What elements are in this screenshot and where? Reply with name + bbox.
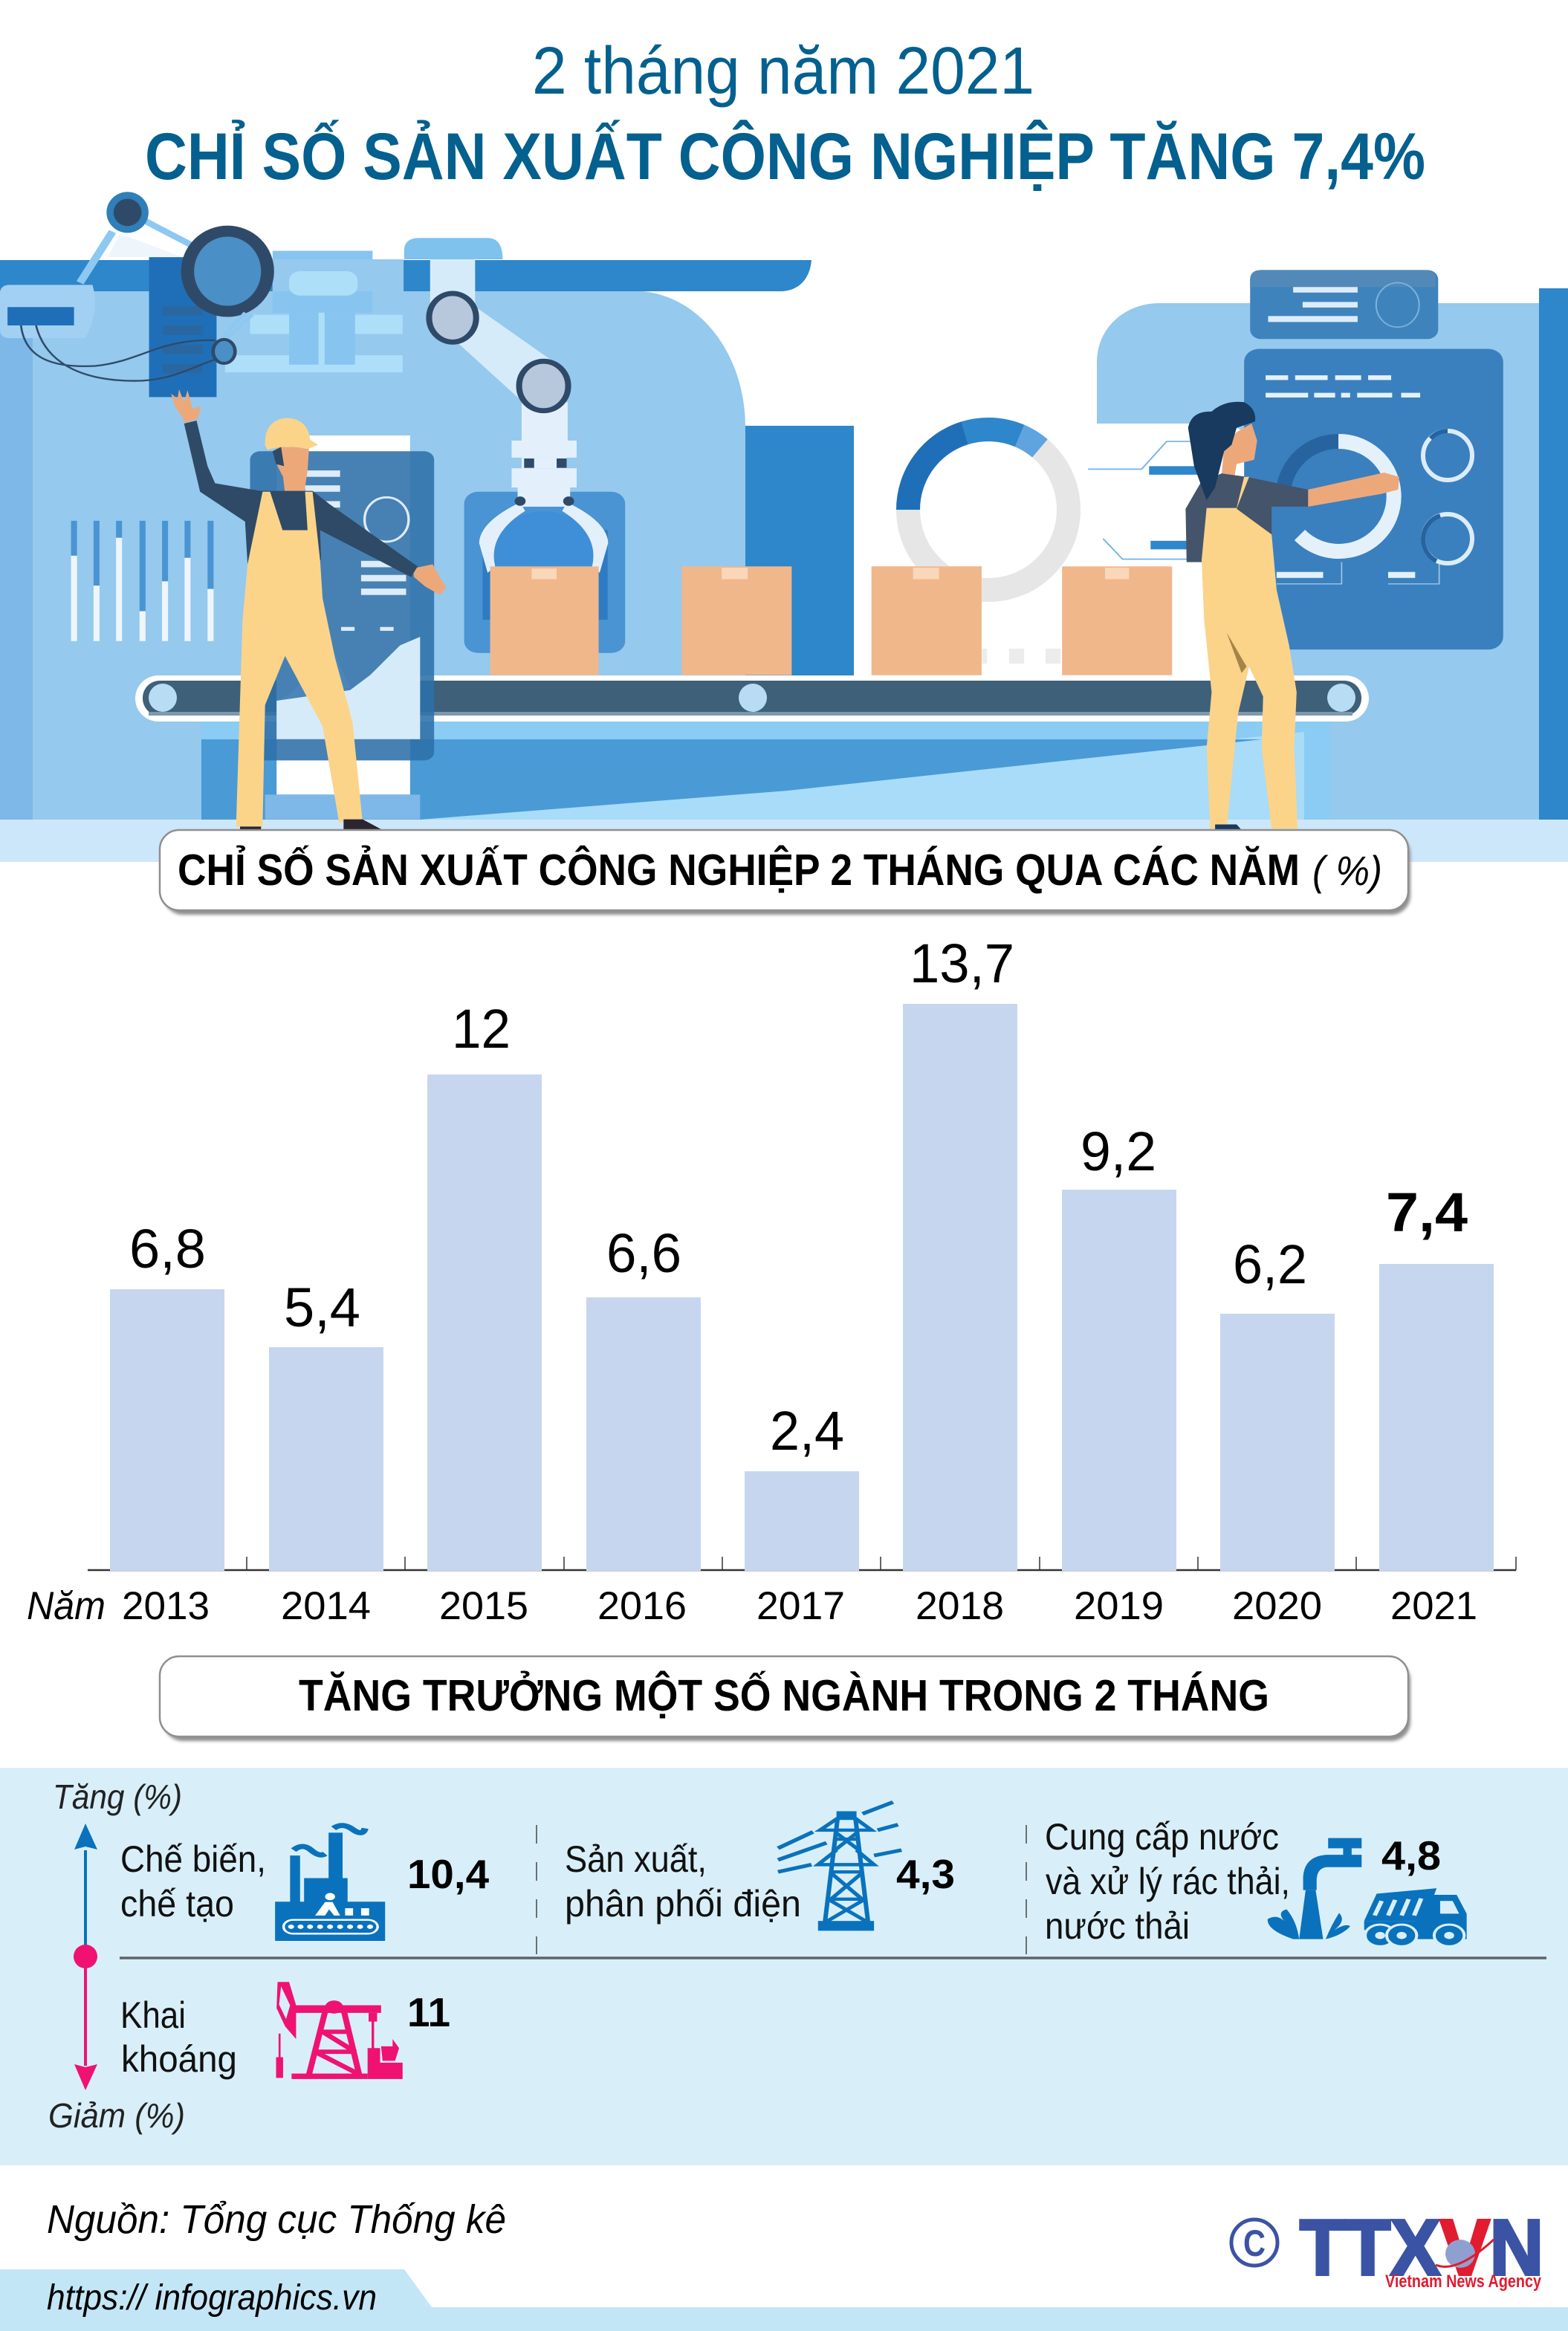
left arm [0,285,95,338]
icon: oil pump [276,1982,403,2079]
floor under conveyor [201,722,1330,820]
sector: water and waste [1045,1816,1467,1947]
big ring [187,231,268,311]
top beam [0,260,811,291]
white display area [854,424,1260,680]
heading pill: sector growth [160,1656,1410,1741]
gripper [511,441,577,458]
overalls [236,492,363,826]
sector: manufacturing: Chế biến, [120,1838,266,1880]
year labels: 2015 [439,1584,528,1628]
sector: water and waste: Cung cấp nước [1045,1816,1279,1858]
year labels: 2014 [281,1584,371,1628]
axis labels: Giảm (%) [48,2096,185,2135]
sector: mining: Khai [120,1994,186,2036]
value labels: 13,7 [910,933,1014,994]
sector: mining [120,1982,450,2080]
year labels: 2021 [1390,1584,1477,1628]
sector: electricity: phân phối điện [565,1883,801,1925]
boxes on right [872,566,982,675]
right machine body [1097,303,1539,820]
icon: power tower [778,1802,901,1930]
dark column [149,257,216,397]
value labels: 7,4 [1386,1181,1468,1243]
sector: water and waste: và xử lý rác thải, [1046,1861,1290,1902]
year labels: 2017 [757,1584,845,1628]
left mechanism in reference coordinates [0,192,791,675]
bottom light band [0,820,1568,862]
panel donut chart [1283,441,1394,551]
sector: electricity: 4,3 [896,1851,955,1897]
donut chart on white [908,429,1069,590]
worker: man [171,389,446,830]
heading pill: yearly index: ( %) [1312,847,1382,894]
left machine body [33,291,745,820]
right machine panels in reference coordinates [872,270,1503,675]
bar chart [27,933,1516,1628]
logo: TTXVN: C [1243,2223,1266,2264]
sector: mining: 11 [407,1989,450,2035]
title [145,34,1425,193]
hands and head [171,389,201,423]
robot arm [404,238,502,259]
sector: electricity [565,1802,955,1930]
value labels: 2,4 [770,1400,844,1462]
value labels: 12 [452,998,511,1060]
year labels: 2018 [916,1584,1004,1628]
small rings [1423,431,1472,563]
sector: manufacturing: 10,4 [407,1851,489,1897]
year labels: 2020 [1232,1584,1322,1628]
light block [273,250,372,313]
triangle linkage [108,234,183,257]
heading pill: yearly index: CHỈ SỐ SẢN XUẤT CÔNG NGHIỆP 2 THÁNG QUA CÁC NĂM [178,845,1300,895]
year labels: Năm [27,1584,106,1628]
axis [88,1569,1516,1571]
axis labels [48,1777,185,2135]
wires [21,325,215,381]
boxes [490,566,599,675]
sector: manufacturing [120,1826,489,1941]
source note: Nguồn: Tổng cục Thống kê [47,2197,506,2242]
sector: manufacturing: chế tạo [120,1883,234,1925]
value labels: 5,4 [284,1277,360,1338]
icon: water tap and truck [1268,1838,1467,1946]
sector: water and waste: nước thải [1045,1905,1190,1947]
heading pill: sector growth: TĂNG TRƯỞNG MỘT SỐ NGÀNH TRONG 2 THÁNG [299,1670,1269,1720]
boxes in front of donut [872,566,982,675]
icon: factory [275,1826,385,1941]
heading pill: yearly index [160,830,1410,915]
small connector lines [1088,441,1194,559]
bars [110,1004,1494,1571]
value labels: 9,2 [1081,1121,1156,1182]
sector: mining: khoáng [121,2038,237,2080]
footer strip [0,2269,1568,2331]
year labels: 2016 [597,1584,687,1628]
sector: water and waste: 4,8 [1381,1832,1441,1878]
screen behind man [276,435,410,794]
big panel [1244,349,1503,649]
sector: electricity: Sản xuất, [565,1838,707,1880]
title: 2 tháng năm 2021 [532,34,1034,108]
value labels: 6,2 [1233,1233,1307,1295]
illustration: factory production line [0,192,1568,862]
worker: woman [1185,402,1399,830]
gripper panel [464,492,625,653]
year labels: 2013 [122,1584,210,1628]
dark shirt [184,421,418,577]
website url: https:// infographics.vn [47,2278,377,2318]
value labels [129,933,1468,1462]
panel: sector growth [0,1768,1568,2165]
axis arrows [74,1823,97,2090]
value labels: 6,6 [606,1222,681,1284]
sliders [74,521,210,641]
title: CHỈ SỐ SẢN XUẤT CÔNG NGHIỆP TĂNG 7,4% [145,119,1425,193]
year labels: 2019 [1074,1584,1164,1628]
logo: TTXVN: TTXVN [1300,2204,1543,2292]
divider lines [120,1956,1546,1959]
value labels: 6,8 [129,1218,206,1280]
conveyor belt [135,675,1369,722]
year labels [27,1584,1477,1628]
top small panel [1250,270,1438,339]
axis labels: Tăng (%) [53,1777,182,1816]
